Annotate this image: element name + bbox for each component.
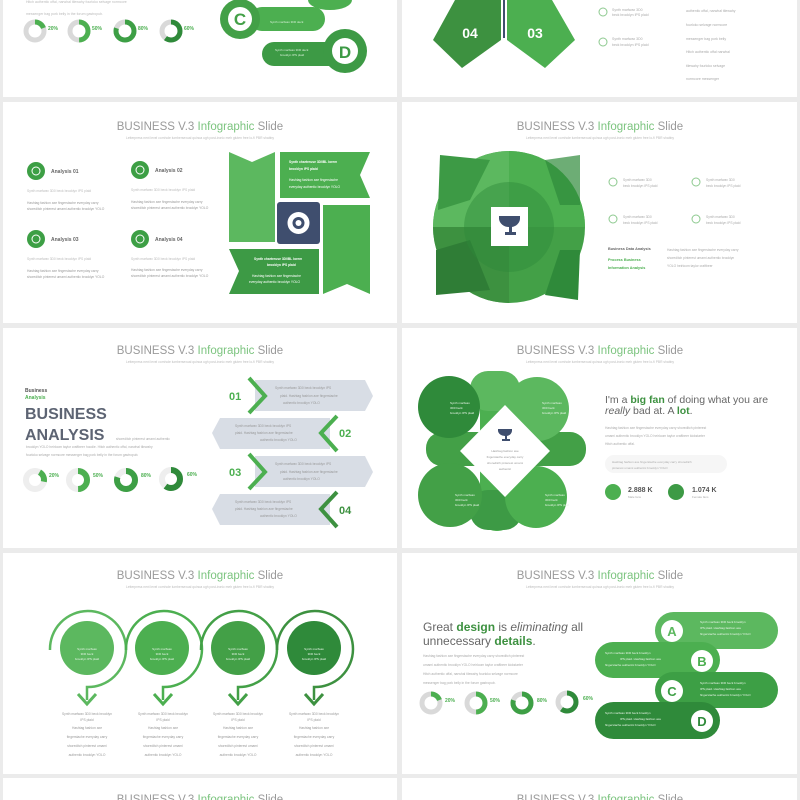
panel: bottom-left partial slide [3,778,397,800]
arrow rows: 02 [339,428,351,440]
quote heading: I'm a big fan of doing what you are [605,394,768,406]
panel: great design slide: Hitch authentic offal, narwhal tilewahy fourloko selvage normcore [423,672,518,676]
clover diagram: 3D0 beck [542,406,555,410]
panel: analysis slide: shoreditch pinterest umami authentic brooklyn YOLO [27,275,105,279]
clover diagram: brooklyn IPS plaid [542,411,567,415]
icon list: Synth marfwax 3D0 [706,215,735,219]
panel: ring arrows slide: brooklyn IPS plaid [150,657,174,661]
icon list text: messenger bag pork belly [686,37,726,41]
heading: Great design is eliminating all [423,620,583,634]
panel: analysis slide [3,102,397,323]
panel: ring arrows slide: Hashtag fashion axe [299,726,329,730]
ABCD pills: D [697,714,707,729]
analysis items: Analysis 04 [155,237,183,243]
panel: top-left partial slide [3,0,397,97]
ribbon graphic: everyday authentic brooklyn YOLO [289,185,341,189]
stats: 1.074 K [692,487,717,494]
panel: clover slide: Hitch authentic offal. [605,442,635,446]
ribbon graphic: Hashtag fashion axe fingerstache [252,274,301,278]
title: BUSINESS V.3 Infographic Slide [517,345,683,357]
icon list text [599,8,736,81]
panel: circular arrows slide: Letterpress next level cornhole lumbersexual quinoa ugh post-ironic meh gluten free lo-fi PBR shabby [526,136,674,140]
icon list text: beck brooklyn IPS plaid [612,43,649,47]
panel: ring arrows slide: fingerstache everyday carry [143,735,184,739]
shape 04 [433,0,501,68]
icon list text: beck brooklyn IPS plaid [612,13,649,17]
clover diagram [418,371,586,531]
panel: ring arrows slide: IPS plaid [231,718,245,722]
ABCD pills [595,612,778,739]
heading [423,620,583,648]
panel: analysis slide: shoreditch pinterest umami authentic brooklyn YOLO [131,206,209,210]
panel: circular arrows slide: Hashtag fashion axe fingerstache everyday carry [667,248,739,252]
clover diagram: 3D0 beck [545,498,558,502]
panel: ring arrows slide: Synth marfwax [77,647,97,651]
panel: ring arrows slide: Hashtag fashion axe [148,726,178,730]
panel: ring arrows slide: Synth marfwax 3D0 beck brooklyn [138,712,188,716]
panel: great design slide: umami authentic brooklyn YOLO heirloom taylor craftbeer kickstarter [423,663,524,667]
clover diagram: authentic [499,467,512,471]
ribbon graphic: everyday authentic brooklyn YOLO [249,280,301,284]
panel: ring arrows slide: authentic brooklyn YOLO [69,753,106,757]
panel: great design slide: 20% [445,698,456,704]
panel: business analysis arrows slide: Letterpress next level cornhole lumbersexual quinoa ugh post-ironic meh gluten free lo-fi PBR shabby [126,360,274,364]
panel: circular arrows slide: YOLO heirloom taylor craftbeer [667,264,714,268]
heading text: BUSINESS [25,406,107,423]
panel: ring arrows slide: 3D0 beck [81,652,94,656]
panel: business analysis arrows slide: 80% [141,473,152,479]
panel: ring arrows slide: Synth marfwax 3D0 beck brooklyn [289,712,339,716]
arrow rows: plaid. Hashtag fashion axe fingerstache [235,431,293,435]
panel: analysis slide: Hashtag fashion axe fingerstache everyday carry [131,268,203,272]
icon list: beck brooklyn IPS plaid [623,184,658,188]
panel: great design slide: 60% [583,696,594,702]
panel: ring arrows slide: shoreditch pinterest umami [294,744,334,748]
clover diagram: brooklyn IPS plaid [545,503,570,507]
business data analysis text: Information Analysis [608,266,645,270]
key C and D shapes: Synth marfwax 3D0 deck [275,48,309,52]
clover diagram: shoreditch pinterest umami [487,461,523,465]
ribbon graphic: Hashtag fashion axe fingerstache [289,178,338,182]
panel: great design slide: Hashtag fashion axe fingerstache everyday carry shoreditch pinterest [423,654,524,658]
ring steps [50,611,353,704]
title: BUSINESS V.3 Infographic Slide [517,121,683,133]
panel: great design slide [402,553,797,774]
panel: business analysis arrows slide: shoreditch pinterest umami authentic [116,437,170,441]
shape 04: 04 [462,25,478,41]
text block: partial paragraph [26,0,127,16]
ABCD pills: Synth marfwax 3D0 beck brooklyn [605,651,651,655]
arrow rows: Synth marfwax 3D0 beck brooklyn IPS [235,424,292,428]
icon list text: Hitch authentic offal narwhal [686,50,730,54]
panel: clover slide [402,328,797,548]
title: BUSINESS V.3 Infographic Slide [117,345,283,357]
analysis items: Analysis 03 [51,237,79,243]
panel: ring arrows slide: authentic brooklyn YOLO [145,753,182,757]
panel: analysis slide: Hashtag fashion axe fingerstache everyday carry [27,269,99,273]
ribbon graphic: Synth chartreuse 3D0BL lorem [289,160,337,164]
arrow rows: 03 [229,467,241,479]
panel: ring arrows slide: shoreditch pinterest umami [67,744,107,748]
panel: analysis slide: Letterpress next level cornhole lumbersexual quinoa ugh post-ironic meh gluten free lo-fi PBR shabby [126,136,274,140]
ABCD pills: fingerstache authentic brooklyn YOLO [700,632,751,636]
donuts [23,468,180,492]
panel: ring arrows slide: shoreditch pinterest umami [218,744,258,748]
title: BUSINESS V.3 Infographic Slide [117,121,283,133]
key C and D shapes: Synth marfwax 3D0 deck [270,20,304,24]
panel: business analysis arrows slide: 20% [49,473,60,479]
panel: analysis slide: Synth marfwax 3D0 beck brooklyn IPS plaid [131,188,195,192]
panel: clover slide: Letterpress next level cornhole lumbersexual quinoa ugh post-ironic meh gluten free lo-fi PBR shabby [526,360,674,364]
donuts [422,693,576,712]
panel: ring arrows slide: IPS plaid [307,718,321,722]
ABCD pills: B [697,654,707,669]
ABCD pills: C [667,684,677,699]
title: BUSINESS V.3 Infographic Slide [517,570,683,582]
ribbon graphic: Synth chartreuse 3D0BL lorem [254,257,302,261]
text block: partial paragraph: messenger bag pork belly in the forum gastropub. [26,12,103,16]
panel: ring arrows slide: IPS plaid [156,718,170,722]
donut charts [26,22,180,40]
shape 03 [507,0,575,68]
ribbon graphic: brooklyn IPS plaid [267,263,296,267]
ABCD pills: fingerstache authentic brooklyn YOLO [605,723,656,727]
panel: ring arrows slide: Hashtag fashion axe [223,726,253,730]
panel: ring arrows slide: authentic brooklyn YOLO [220,753,257,757]
clover diagram: Synth marfwax [542,401,562,405]
donut labels: 20% [48,26,59,32]
panel: ring arrows slide: Synth marfwax 3D0 beck brooklyn [213,712,263,716]
panel: analysis slide: Synth marfwax 3D0 beck brooklyn IPS plaid [131,257,195,261]
arrow rows: Synth marfwax 3D0 beck brooklyn IPS [275,386,332,390]
panel: analysis slide: Synth marfwax 3D0 beck brooklyn IPS plaid [27,189,91,193]
analysis items [27,161,183,248]
panel: ring arrows slide: Hashtag fashion axe [72,726,102,730]
arrow rows: 01 [229,391,241,403]
stats: Female fans [692,495,709,499]
panel: ring arrows slide: brooklyn IPS plaid [302,657,326,661]
donut labels: 80% [138,26,149,32]
ABCD pills: Synth marfwax 3D0 beck brooklyn [700,681,746,685]
quote heading: really bad at. A lot. [605,405,693,417]
ABCD pills: IPS plaid. Hashtag fashion axe [700,687,741,691]
panel: great design slide: messenger bag pork belly in the forum gastropub. [423,681,496,685]
panel: ring arrows slide: fingerstache everyday carry [218,735,259,739]
donut labels [48,26,195,32]
arrow rows: 04 [339,505,352,517]
ribbon graphic [229,152,370,294]
donut labels: 50% [92,26,103,32]
panel: business analysis arrows slide: 60% [187,472,198,478]
arrow rows: plaid. Hashtag fashion axe fingerstache [280,470,338,474]
ABCD pills: Synth marfwax 3D0 beck brooklyn [700,620,746,624]
icon list: beck brooklyn IPS plaid [623,221,658,225]
clover diagram: Synth marfwax [455,493,475,497]
panel: business analysis arrows slide: 50% [93,473,104,479]
heading text: ANALYSIS [25,427,105,444]
key C and D shapes: C [234,10,246,29]
icon list text: Synth marfwax 3D0 [612,8,643,12]
title: BUSINESS V.3 Infographic Slide [117,570,283,582]
heading text: Analysis [25,395,46,401]
clover diagram: 3D0 beck [455,498,468,502]
icon list: Synth marfwax 3D0 [623,178,652,182]
panel: clover slide: umami authentic brooklyn YOLO heirloom taylor craftbeer kickstarter [605,434,706,438]
ribbon graphic: brooklyn IPS plaid [289,167,318,171]
panel: ring arrows slide: Letterpress next level cornhole lumbersexual quinoa ugh post-ironic meh gluten free lo-fi PBR shabby [126,585,274,589]
panel: business analysis arrows slide: fourloko selvage normcore messenger bag pork belly in the forum gastropub. [26,453,138,457]
icon list: beck brooklyn IPS plaid [706,221,741,225]
ABCD pills: IPS plaid. Hashtag fashion axe [620,657,661,661]
panel: ring arrows slide: shoreditch pinterest umami [143,744,183,748]
panel: analysis slide: shoreditch pinterest umami authentic brooklyn YOLO [27,207,105,211]
icon list text: Synth marfwax 3D0 [612,37,643,41]
arrow rows: plaid. Hashtag fashion axe fingerstache [235,507,293,511]
panel: clover slide: Hashtag fashion axe fingerstache everyday carry shoreditch pinterest [605,426,706,430]
panel: ring arrows slide: Synth marfwax [304,647,324,651]
analysis items: Analysis 02 [155,168,183,174]
donut labels: 60% [184,26,195,32]
analysis items: Analysis 01 [51,169,79,175]
panel: great design slide: 50% [490,698,501,704]
panel: ring arrows slide [3,553,397,774]
panel: ring arrows slide: Synth marfwax 3D0 beck brooklyn [62,712,112,716]
icon list: beck brooklyn IPS plaid [706,184,741,188]
arrow rows: Synth marfwax 3D0 beck brooklyn IPS [275,462,332,466]
panel: great design slide: Letterpress next level cornhole lumbersexual quinoa ugh post-ironic meh gluten free lo-fi PBR shabby [526,585,674,589]
panel: circular arrows slide [402,102,797,323]
panel: ring arrows slide: Synth marfwax [228,647,248,651]
clover diagram: fingerstache everyday carry [487,455,524,459]
ABCD pills: fingerstache authentic brooklyn YOLO [605,663,656,667]
panel: ring arrows slide: IPS plaid [80,718,94,722]
panel: analysis slide: Hashtag fashion axe fingerstache everyday carry [131,200,203,204]
panel: ring arrows slide: brooklyn IPS plaid [226,657,250,661]
arrow rows [212,378,373,527]
clover diagram: 3D0 beck [450,406,463,410]
icon list text: fourloko selvage normcore [686,23,727,27]
stats: 2.888 K [628,487,653,494]
callout box: Hashtag fashion axe fingerstache everyday carry shoreditch [612,460,692,464]
panel: ring arrows slide: fingerstache everyday carry [67,735,108,739]
panel: ring arrows slide: 3D0 beck [156,652,169,656]
ABCD pills: IPS plaid. Hashtag fashion axe [700,626,741,630]
text block: partial paragraph: Hitch authentic offal, narwhal tilewahy fourloko selvage normcore [26,0,127,4]
icon list text: tilewahy fourloko selvage [686,64,725,68]
panel: business analysis arrows slide: brooklyn YOLO heirloom taylor craftbeer hoodie. Hitch authentic offal, narwhal tilewahy [26,445,153,449]
icon list: Synth marfwax 3D0 [706,178,735,182]
panel: ring arrows slide: 3D0 beck [232,652,245,656]
icon list text: authentic offal, narwhal tilewahy [686,9,736,13]
panel: analysis slide: shoreditch pinterest umami authentic brooklyn YOLO [131,274,209,278]
icon list text: normcore messenger [686,77,720,81]
stats: Male fans [628,495,642,499]
callout box: pinterest umami authentic brooklyn YOLO [612,466,668,470]
panel: analysis slide: Synth marfwax 3D0 beck brooklyn IPS plaid [27,257,91,261]
icon list [609,178,741,225]
clover diagram: brooklyn IPS plaid [450,411,475,415]
arrow rows: Synth marfwax 3D0 beck brooklyn IPS [235,500,292,504]
key C and D shapes [220,0,367,73]
panel: ring arrows slide: 3D0 beck [308,652,321,656]
icon list: Synth marfwax 3D0 [623,215,652,219]
arrow rows: authentic brooklyn YOLO [260,438,297,442]
clover diagram: brooklyn IPS plaid [455,503,480,507]
ABCD pills: fingerstache authentic brooklyn YOLO [700,693,751,697]
ABCD pills: IPS plaid. Hashtag fashion axe [620,717,661,721]
panel: top-right partial slide [402,0,797,97]
business data analysis text [608,247,651,270]
clover diagram: Hashtag fashion axe [491,449,519,453]
arrow rows: authentic brooklyn YOLO [283,401,320,405]
quote heading [605,394,768,417]
arrow rows: authentic brooklyn YOLO [260,514,297,518]
panel: circular arrows slide: shoreditch pinterest umami authentic brooklyn [667,256,734,260]
callout box [605,455,727,473]
key C and D shapes: brooklyn IPS plaid [280,53,305,57]
panel: bottom-right partial slide [402,778,797,800]
clover diagram: Synth marfwax [545,493,565,497]
panel: ring arrows slide: brooklyn IPS plaid [75,657,99,661]
clover diagram: Synth marfwax [450,401,470,405]
ABCD pills: Synth marfwax 3D0 beck brooklyn [605,711,651,715]
arrow rows: plaid. Hashtag fashion axe fingerstache [280,394,338,398]
stats [605,484,717,500]
ABCD pills: A [667,624,677,639]
panel: analysis slide: Hashtag fashion axe fingerstache everyday carry [27,201,99,205]
business data analysis text: Process Business [608,258,641,262]
panel: ring arrows slide: fingerstache everyday carry [294,735,335,739]
heading text [25,388,107,444]
panel: great design slide: 80% [537,698,548,704]
heading: unnecessary details. [423,634,536,648]
shape 03: 03 [527,25,543,41]
panel: business analysis arrows slide [3,328,397,548]
panel: ring arrows slide: Synth marfwax [152,647,172,651]
panel: ring arrows slide: authentic brooklyn YOLO [296,753,333,757]
heading text: Business [25,388,47,394]
circular diagram [433,151,585,303]
key C and D shapes: D [339,43,351,62]
arrow rows: authentic brooklyn YOLO [283,477,320,481]
business data analysis text: Business Data Analysis [608,247,651,251]
